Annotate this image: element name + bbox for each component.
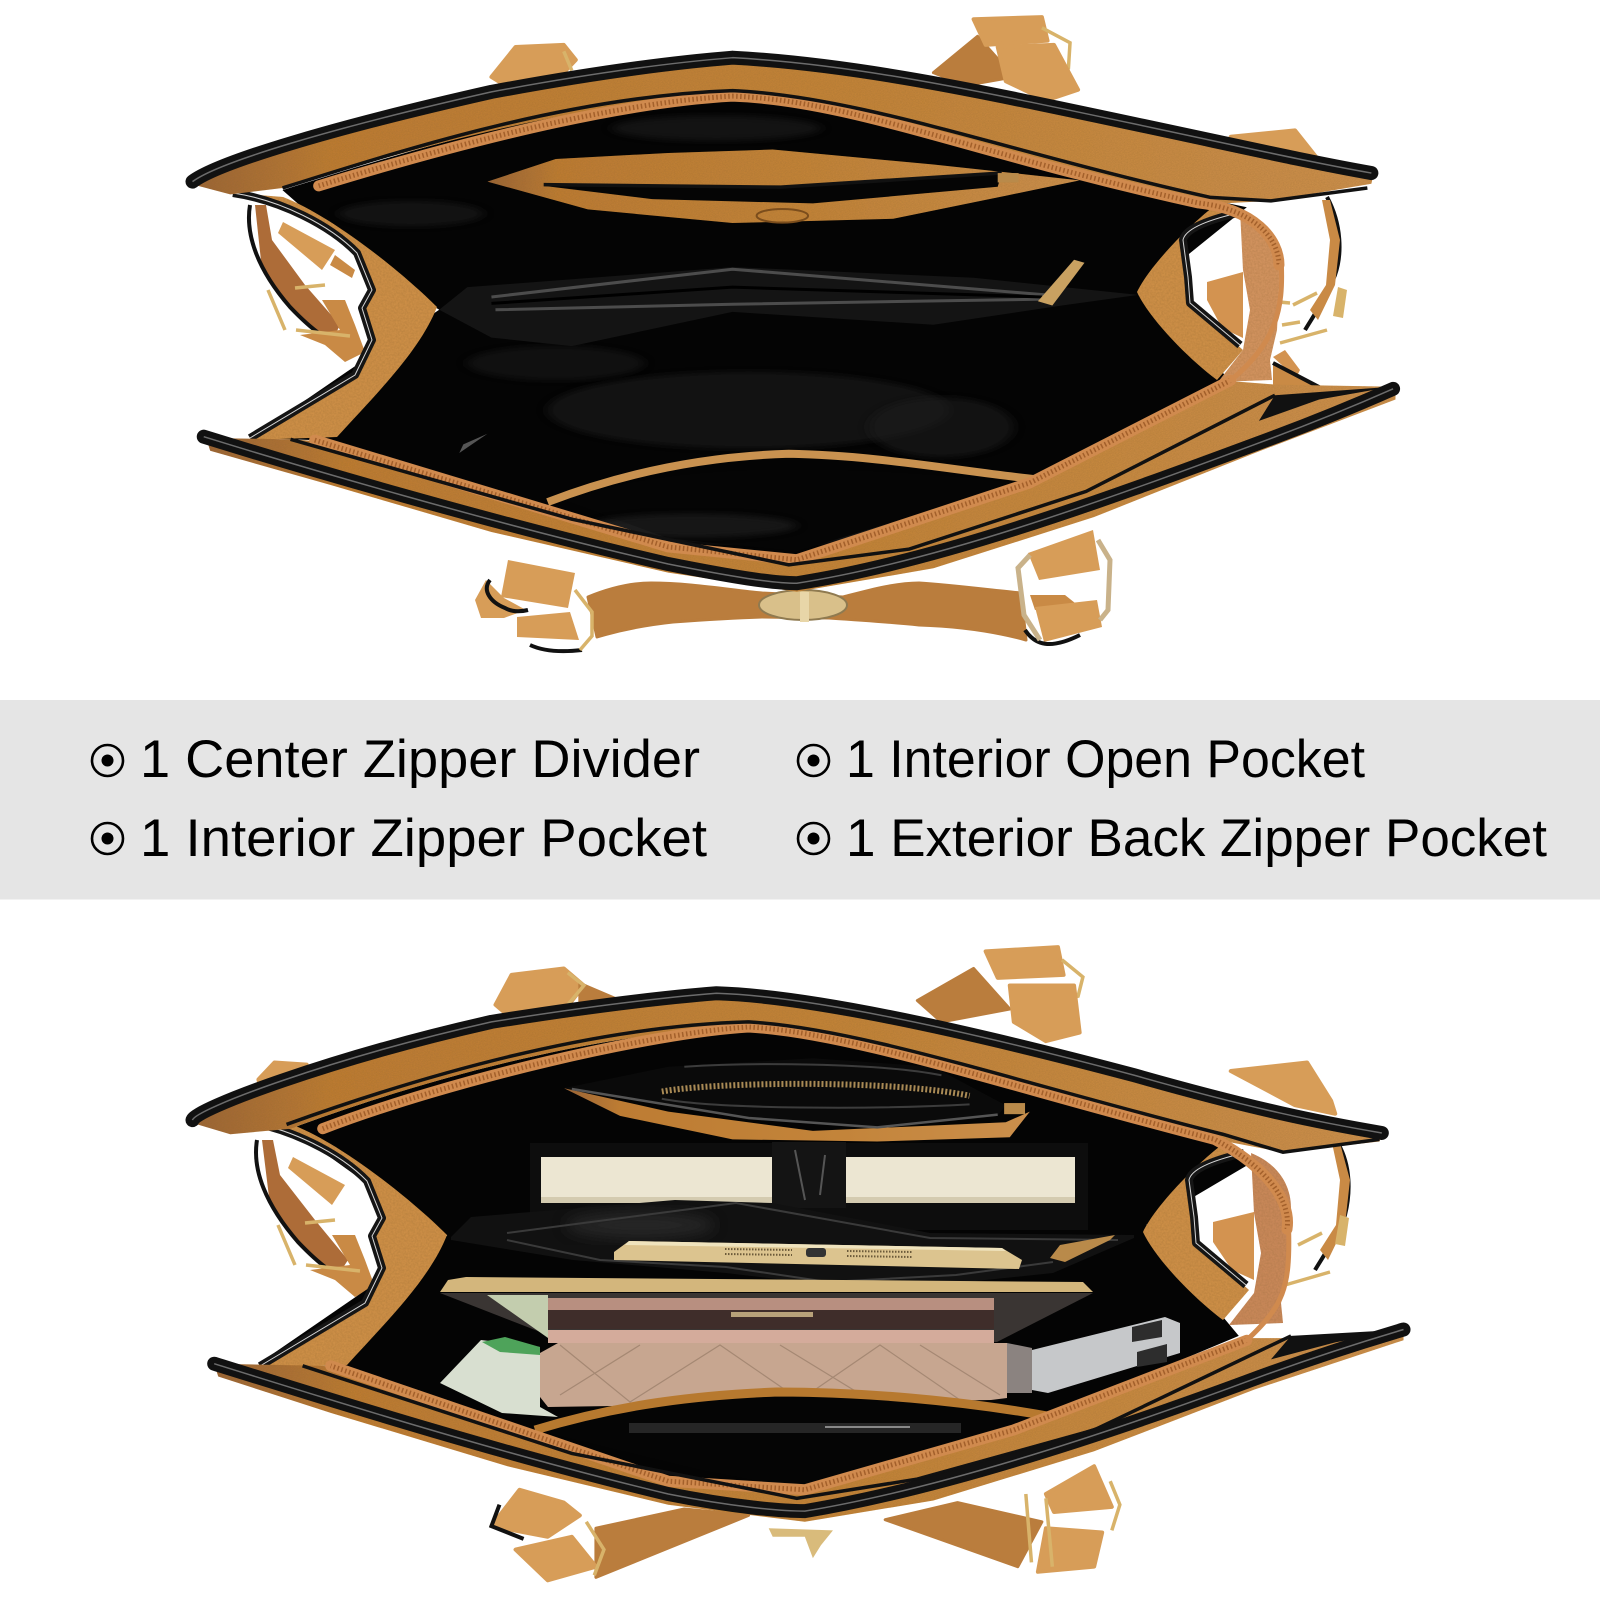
main zipper xyxy=(283,91,1367,565)
feature: 1 Exterior Back Zipper Pocket: 1 Exterior Back Zipper Pocket xyxy=(846,809,1547,868)
feature: 1 Center Zipper Divider: 1 Center Zipper Divider xyxy=(140,730,700,789)
flaps, zipper and rim (scaled layer) xyxy=(190,993,1404,1522)
pink quilted clutch xyxy=(540,1343,1007,1407)
large gold tablet xyxy=(440,1277,1093,1342)
right zipper strip xyxy=(1218,210,1280,382)
right side gusset with piping xyxy=(1137,207,1243,380)
left side gusset with piping xyxy=(243,1121,447,1368)
side straps and bottom handle behind the bag xyxy=(249,197,1347,651)
right zipper strip xyxy=(1229,1153,1291,1325)
book with black strap xyxy=(530,1142,1088,1230)
black bag interior lining xyxy=(258,1026,1255,1490)
handles and interior (scaled layer) xyxy=(258,947,1335,1580)
front open pocket xyxy=(548,454,1038,551)
main zipper xyxy=(287,1022,1379,1498)
photo: empty open handbag, top view xyxy=(190,17,1395,651)
black bag interior lining xyxy=(250,94,1247,560)
left side gusset with piping xyxy=(233,193,437,440)
silver power bank xyxy=(1007,1317,1180,1393)
handles xyxy=(258,947,1335,1580)
feature: 1 Interior Zipper Pocket: 1 Interior Zipper Pocket xyxy=(140,809,707,868)
rear interior zip pocket with logo patch xyxy=(487,150,1080,223)
flaps, zipper and rim (scaled layer) xyxy=(190,58,1395,592)
center zipper divider xyxy=(439,260,1138,346)
front open pocket with phone xyxy=(535,1392,1053,1490)
front flap leather xyxy=(206,381,1395,592)
bullet: center zipper divider xyxy=(92,745,123,776)
top handles xyxy=(491,17,1327,175)
bag rim piping xyxy=(193,58,1393,583)
photo: packed open handbag, top view xyxy=(190,947,1404,1580)
grey band background xyxy=(0,700,1600,900)
feature: 1 Interior Open Pocket: 1 Interior Open Pocket xyxy=(846,730,1365,789)
bullet: interior open pocket xyxy=(798,745,829,776)
center zipper divider pocket xyxy=(451,1200,1134,1285)
side straps behind the packed bag xyxy=(256,1140,1350,1297)
rear zip pocket with gold zipper wallet xyxy=(564,1058,1030,1142)
dark corner behind front flap xyxy=(1259,387,1391,421)
bullet: exterior back zipper pocket xyxy=(798,823,829,854)
dark wallet and pink flap xyxy=(548,1298,994,1343)
right side gusset with piping xyxy=(1143,1147,1249,1320)
green tissue packet xyxy=(440,1337,558,1417)
top handle tabs and interior (scaled layer) xyxy=(250,17,1327,560)
feature band xyxy=(0,700,1600,900)
rear flap leather xyxy=(190,58,1374,204)
front flap leather xyxy=(214,1330,1404,1522)
dark corner behind front flap xyxy=(1271,1330,1404,1359)
bag rim piping xyxy=(193,993,1404,1511)
rear flap leather xyxy=(190,993,1383,1152)
gold tablet in zipper pocket xyxy=(614,1241,1022,1269)
bullet: interior zipper pocket xyxy=(92,823,123,854)
